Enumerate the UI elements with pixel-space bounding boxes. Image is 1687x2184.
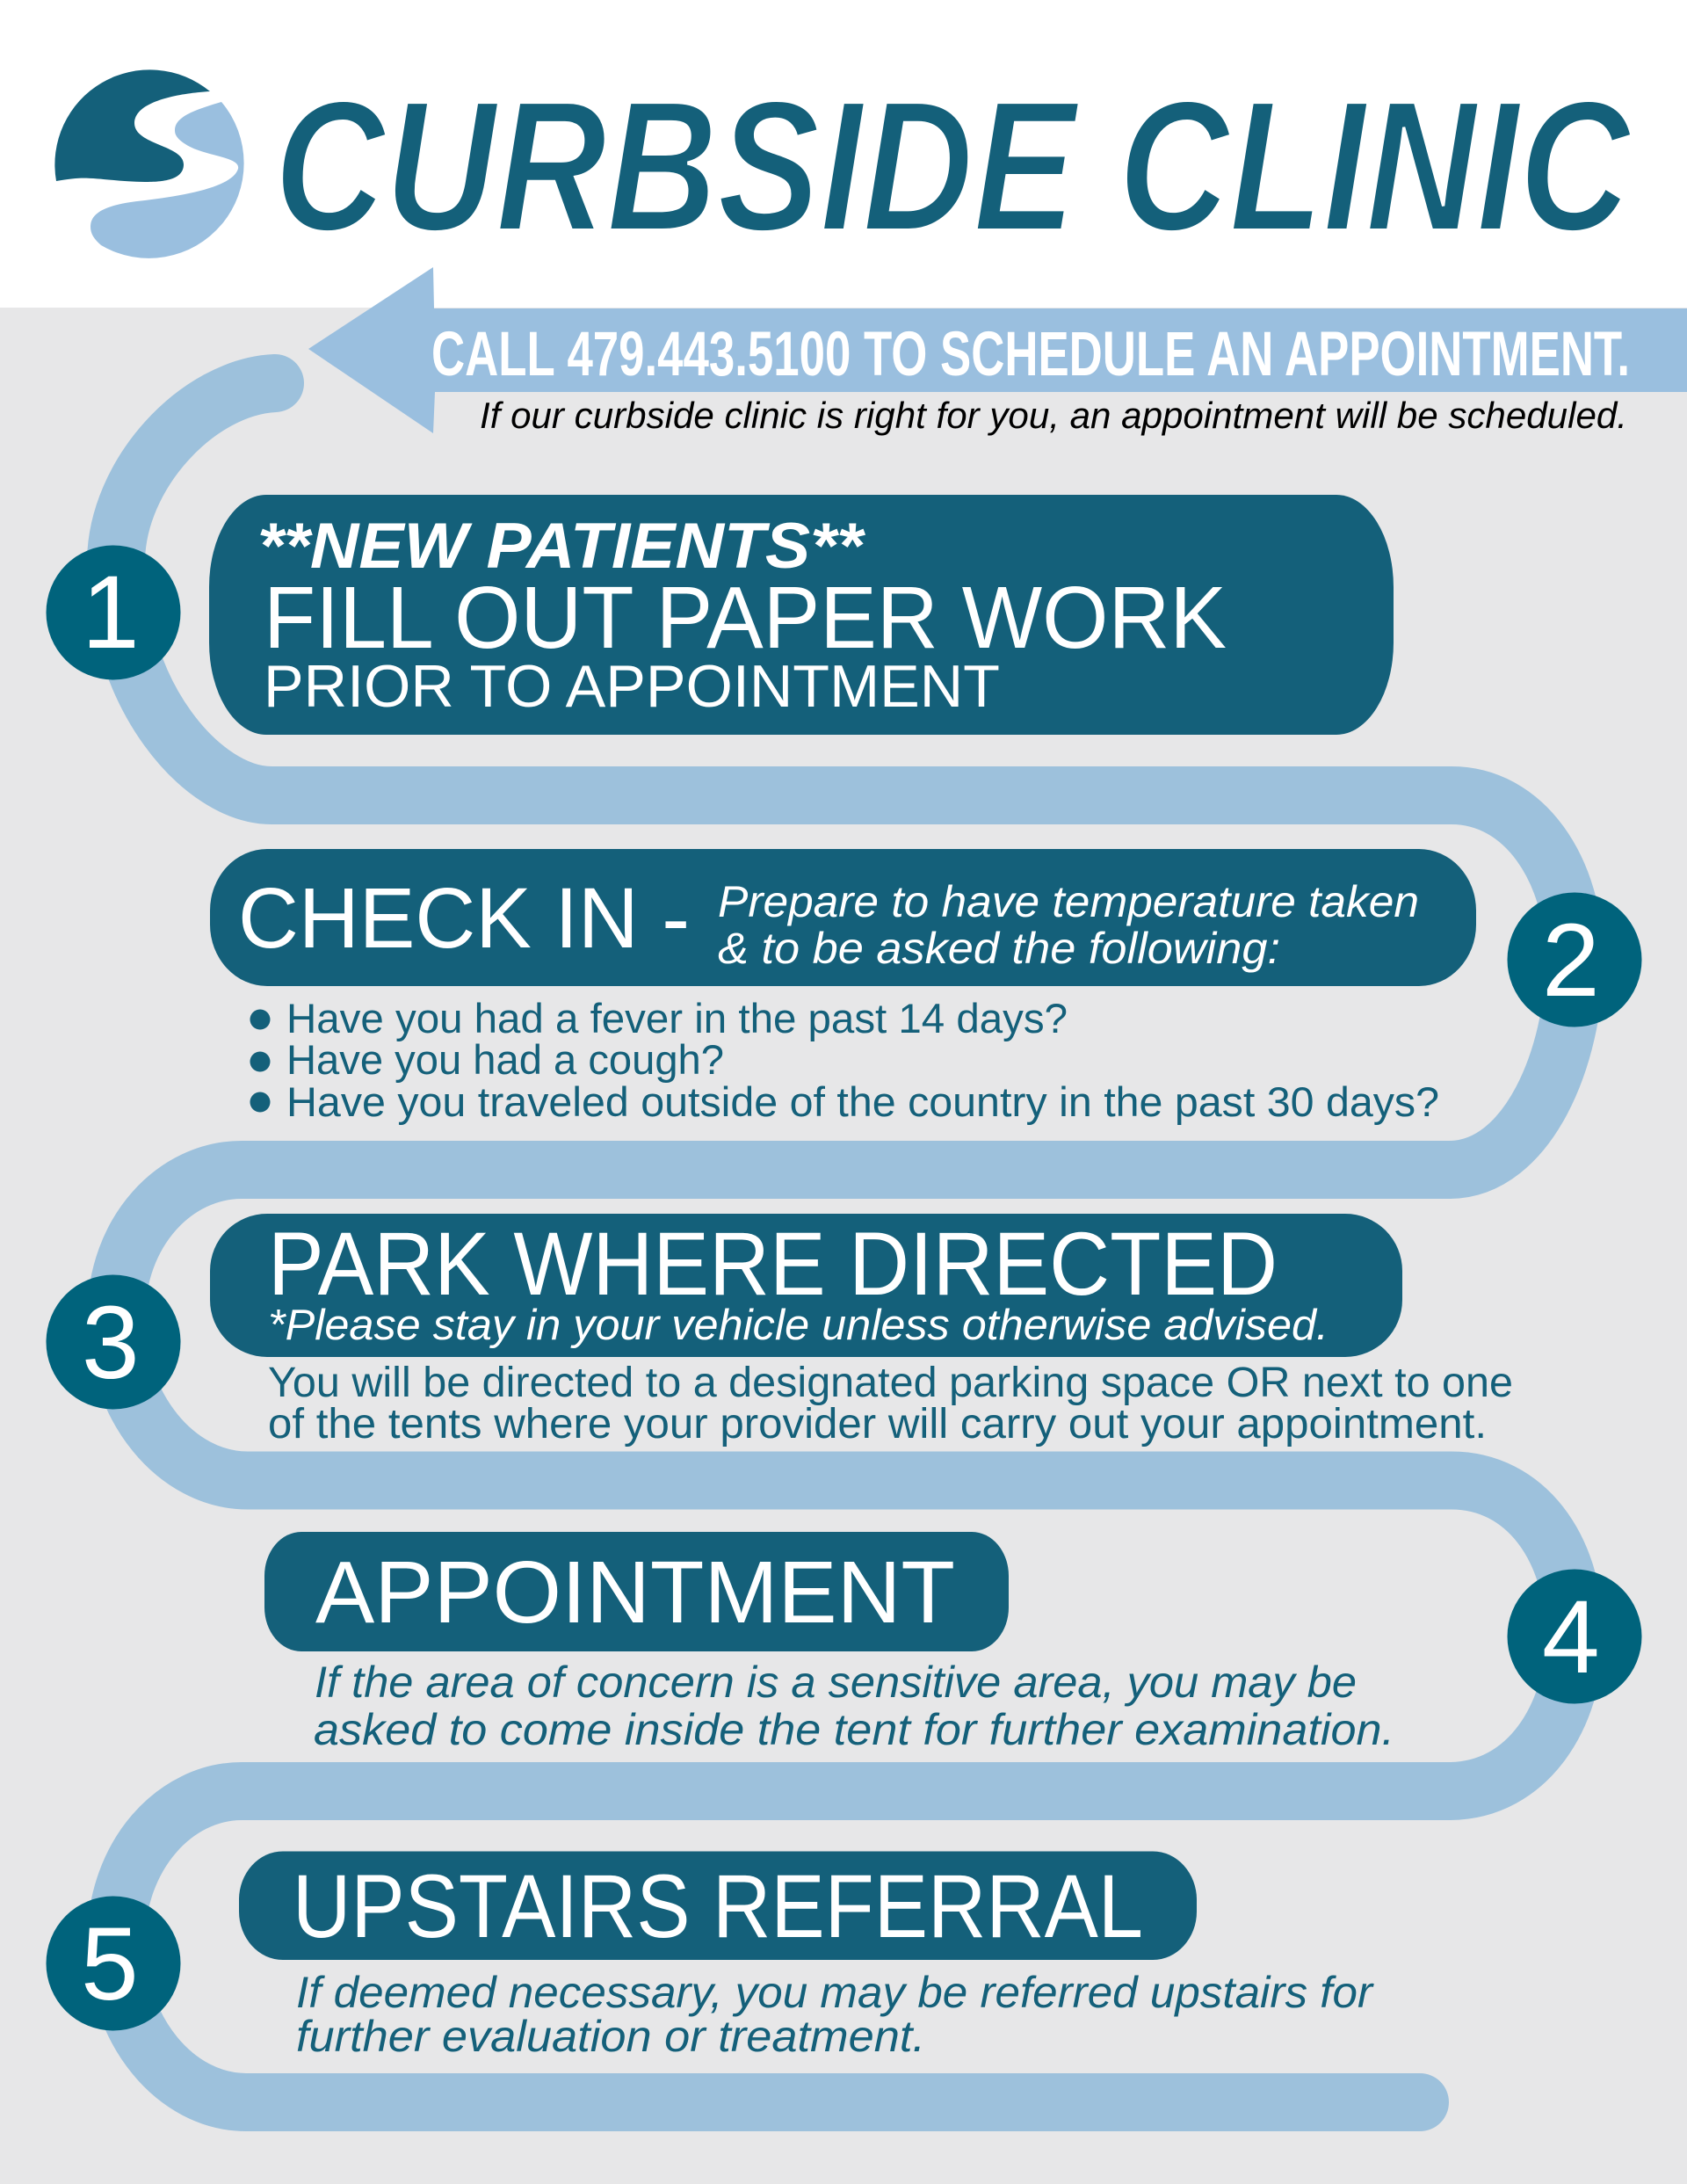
step 3 description [268, 1360, 1513, 1448]
step 4 description: If the area of concern is a sensitive area, you may be [315, 1658, 1357, 1707]
step 4 badge [1508, 1570, 1641, 1703]
step 5 description [296, 1968, 1374, 2061]
step 3 heading: PARK WHERE DIRECTED [268, 1214, 1278, 1314]
step 2 heading: CHECK IN - [238, 870, 690, 966]
step 2 instructions: & to be asked the following: [718, 924, 1280, 973]
step 1 badge: 1 [82, 555, 140, 671]
step 3 pill [210, 1214, 1402, 1357]
appointment note: If our curbside clinic is right for you, an appointment will be scheduled. [480, 395, 1627, 436]
screening questions list [250, 995, 1439, 1125]
step 3 note: *Please stay in your vehicle unless otherwise advised. [268, 1302, 1329, 1349]
panel: step 4 [264, 1532, 1641, 1754]
panel: step 1 [46, 495, 1394, 735]
step 5 description: If deemed necessary, you may be referred upstairs for [296, 1968, 1374, 2017]
step 5 badge: 5 [81, 1906, 139, 2022]
step 3 badge: 3 [82, 1285, 140, 1401]
panel: step 2 [210, 849, 1641, 1125]
step 2 badge: 2 [1542, 903, 1600, 1019]
step 5 pill [239, 1851, 1197, 1960]
step 4 heading: APPOINTMENT [315, 1543, 955, 1642]
step 4 description [314, 1658, 1394, 1754]
step 4 description: asked to come inside the tent for further examination. [314, 1705, 1394, 1754]
step 2 instructions: Prepare to have temperature taken [718, 877, 1419, 926]
step 1 badge [46, 545, 181, 680]
step 4 pill [264, 1532, 1009, 1651]
step 1 subheading: PRIOR TO APPOINTMENT [264, 653, 1000, 720]
step 4 badge: 4 [1542, 1579, 1600, 1695]
step 3 description: You will be directed to a designated parking space OR next to one [268, 1360, 1513, 1406]
winding path ribbon [116, 383, 1575, 2102]
step 5 heading: UPSTAIRS REFERRAL [293, 1856, 1143, 1956]
step 3 badge [46, 1274, 181, 1410]
step 2 pill [210, 849, 1476, 986]
step 5 description: further evaluation or treatment. [296, 2012, 925, 2061]
step 1 pill [209, 495, 1394, 735]
step 2 badge [1508, 893, 1641, 1027]
panel: step 5 [46, 1851, 1374, 2061]
screening questions list: Have you had a cough? [286, 1036, 724, 1083]
panel: step 3 [46, 1214, 1513, 1448]
step 2 instructions [718, 877, 1419, 973]
step 3 description: of the tents where your provider will carry out your appointment. [268, 1401, 1487, 1448]
screening questions list: Have you had a fever in the past 14 days? [286, 995, 1068, 1041]
arrow banner: call to schedule [308, 267, 1687, 433]
step 1 heading: FILL OUT PAPER WORK [264, 569, 1227, 667]
logo: curbside S mark [54, 69, 244, 258]
screening questions list: Have you traveled outside of the country in the past 30 days? [286, 1078, 1439, 1125]
new patients label: **NEW PATIENTS** [257, 511, 866, 582]
step 5 badge [46, 1897, 181, 2030]
